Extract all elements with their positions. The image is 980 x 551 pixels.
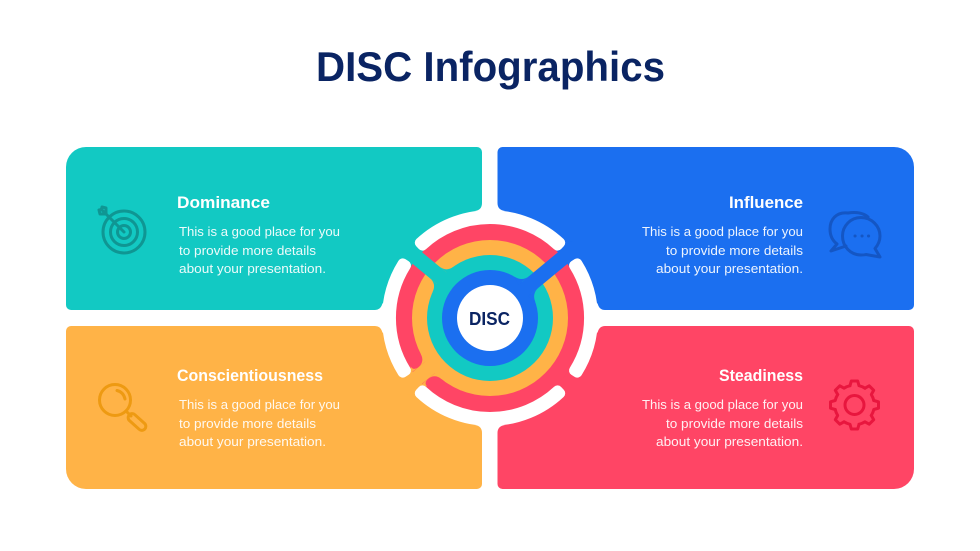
- text: Conscientiousness description: to provide more details: [179, 416, 317, 431]
- text: Influence description: This is a good place for you: [642, 224, 803, 239]
- centre label: DISC: DISC: [469, 308, 510, 329]
- panel: Dominance: [66, 147, 482, 310]
- panel background: blue: [498, 147, 914, 310]
- panel: Conscientiousness: [66, 326, 482, 489]
- centre white circle: [457, 285, 523, 351]
- centre DISC concentric diagram: [375, 203, 605, 433]
- panel: Influence: [498, 147, 914, 310]
- text: Conscientiousness description: [179, 397, 340, 449]
- text: Steadiness description: [642, 397, 804, 449]
- ring: blue: [442, 270, 538, 366]
- text: Dominance description: [179, 224, 340, 276]
- title: DISC Infographics: [316, 43, 665, 90]
- heading: Dominance: Dominance: [177, 193, 270, 212]
- text: Conscientiousness description: This is a good place for you: [179, 397, 340, 412]
- ring: red: [396, 224, 584, 412]
- heading: Conscientiousness: Conscientiousness: [177, 366, 323, 385]
- panel background: teal: [66, 147, 482, 310]
- text: Dominance description: about your presentation.: [179, 261, 326, 276]
- ring: teal: [427, 255, 553, 381]
- text: Steadiness description: to provide more details: [666, 416, 804, 431]
- text: Conscientiousness description: about your presentation.: [179, 434, 326, 449]
- icon: target with arrow: [99, 207, 145, 253]
- text: Influence description: about your presentation.: [656, 261, 803, 276]
- text: Dominance description: This is a good place for you: [179, 224, 340, 239]
- panel background: red: [498, 326, 914, 489]
- channel: orange link to panel: [393, 352, 444, 402]
- text: Steadiness description: about your presentation.: [656, 434, 803, 449]
- text: Influence description: to provide more details: [666, 243, 804, 258]
- heading: Steadiness: Steadiness: [719, 366, 803, 385]
- channel: blue link to panel: [513, 234, 587, 303]
- white outer arc segments: [387, 215, 593, 421]
- panel background: orange: [66, 326, 482, 489]
- heading: Influence: Influence: [729, 193, 803, 212]
- icon: magnifying glass: [100, 384, 147, 432]
- panel: Steadiness: [498, 326, 914, 489]
- text: Dominance description: to provide more details: [179, 243, 317, 258]
- text: Influence description: [642, 224, 804, 276]
- icon: gear: [830, 381, 879, 429]
- white gap fillets: [375, 203, 605, 433]
- icon: chat bubbles: [830, 212, 880, 257]
- channel: teal link to panel: [393, 234, 456, 294]
- text: Steadiness description: This is a good place for you: [642, 397, 803, 412]
- ring: orange: [412, 240, 568, 396]
